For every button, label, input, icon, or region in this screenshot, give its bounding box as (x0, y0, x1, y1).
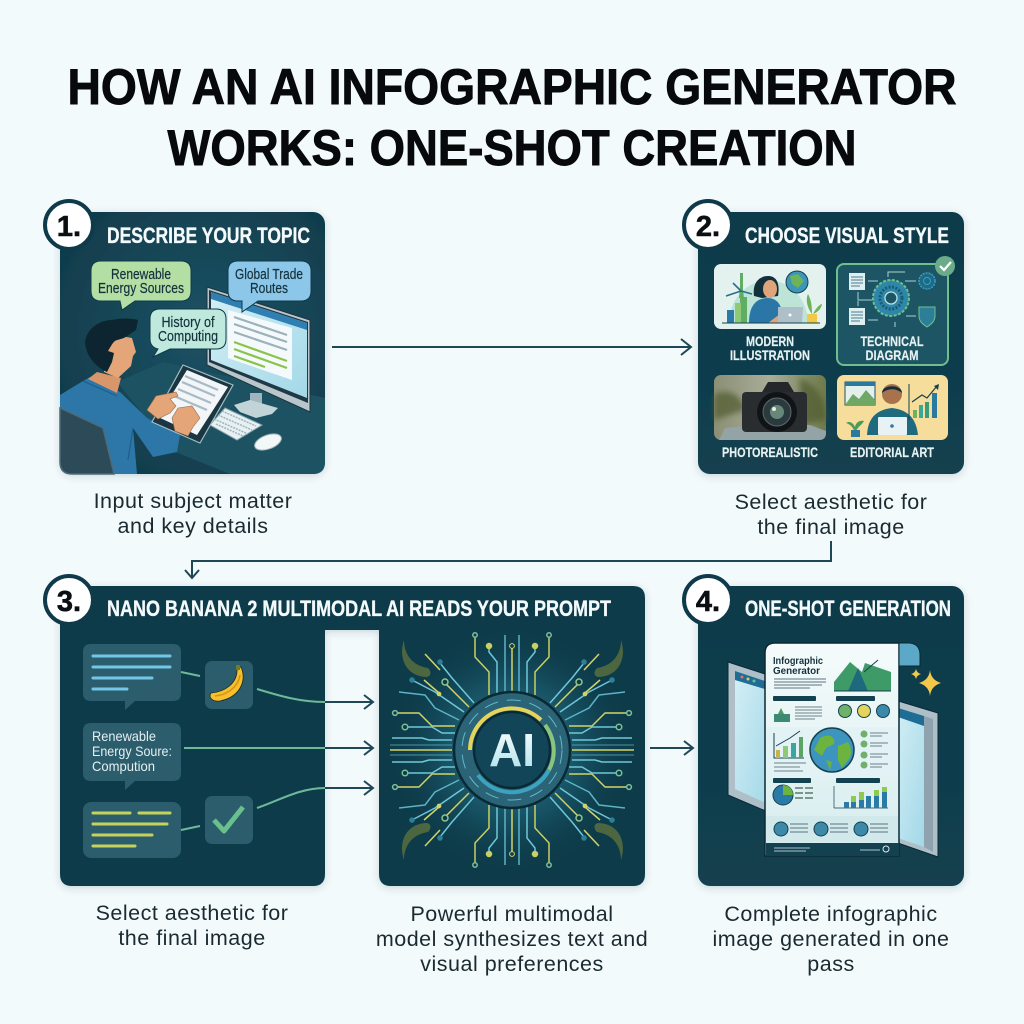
panel 1: describe your topic (60, 212, 325, 474)
prompt card: text: Renewable (92, 728, 156, 744)
caption: model (376, 902, 648, 976)
caption 2: the final image (757, 515, 905, 539)
prompt card: text: Energy Soure: (92, 743, 172, 759)
AI label: AI (489, 724, 535, 776)
label: technical diagram: DIAGRAM (866, 347, 918, 363)
icon: check tile (205, 796, 253, 844)
caption: model: model synthesizes text and (376, 927, 648, 951)
connector: card to check (181, 826, 200, 830)
caption 3 (96, 901, 288, 950)
caption 2: Select aesthetic for (735, 490, 927, 514)
label: modern illustration (730, 333, 810, 363)
caption 1 (94, 489, 292, 538)
arrow 3 to 4 (650, 741, 693, 755)
heading 4: ONE-SHOT GENERATION (745, 596, 951, 621)
caption 2 (735, 490, 927, 539)
poster: Infographic (773, 655, 823, 667)
title: HOW AN AI INFOGRAPHIC GENERATOR (68, 59, 956, 115)
thumbnail: photorealistic (714, 375, 826, 440)
arrow 2 to 3 (185, 541, 831, 578)
check badge (935, 256, 955, 276)
caption 4: Complete infographic (724, 902, 938, 926)
bubble: global trade routes (228, 261, 311, 312)
connector: card to banana (181, 672, 200, 676)
hands (147, 392, 200, 436)
bubble: global trade routes: Global Trade (235, 266, 303, 283)
caption 3: the final image (118, 926, 266, 950)
label: technical diagram (860, 333, 924, 363)
prompt card: text (83, 723, 181, 790)
back device left (728, 662, 768, 812)
caption 1: Input subject matter (94, 489, 292, 513)
bubble: history of computing: Computing (158, 328, 218, 345)
poster (765, 643, 920, 856)
badge 1: 1. (57, 211, 81, 243)
panel 3: nano banana multimodal (60, 586, 645, 886)
person (60, 318, 180, 474)
keyboard (210, 408, 262, 440)
prompt card: green lines (83, 802, 181, 858)
badge 4 (684, 576, 732, 624)
desk (117, 362, 325, 474)
mouse (252, 431, 284, 453)
AI core (454, 692, 570, 808)
label: modern illustration: MODERN (746, 333, 794, 349)
caption 4: pass (807, 952, 855, 976)
circuit traces (390, 633, 634, 867)
bubble: renewable energy sources: Renewable (111, 266, 171, 283)
label: photorealistic: PHOTOREALISTIC (722, 444, 818, 460)
connectors in panel 3 (184, 689, 325, 808)
badge 2: 2. (696, 211, 720, 243)
sparkle stars (911, 669, 941, 696)
badge 2 (684, 201, 732, 249)
badge 1 (45, 201, 93, 249)
caption: model: Powerful multimodal (410, 902, 614, 926)
thumbnail: technical diagram (837, 264, 948, 365)
prompt card: blue lines (83, 644, 181, 710)
prompt card: text: Compution (92, 758, 155, 774)
panel 2: choose visual style (698, 212, 964, 474)
caption 1: and key details (118, 514, 268, 538)
arrow 1 to 2 (332, 339, 691, 355)
badge 3: 3. (57, 586, 81, 618)
label: editorial art: EDITORIAL ART (850, 444, 934, 460)
caption 4 (713, 902, 949, 976)
bubble: global trade routes: Routes (250, 280, 288, 297)
title (68, 59, 956, 176)
heading 1: DESCRIBE YOUR TOPIC (107, 223, 310, 248)
heading 3: NANO BANANA 2 MULTIMODAL AI READS YOUR PROMPT (107, 596, 611, 621)
thumbnail: editorial art (837, 375, 948, 440)
thumbnail: modern illustration (714, 264, 826, 329)
label: technical diagram: TECHNICAL (860, 333, 924, 349)
icon: banana tile (205, 661, 253, 709)
bubble: renewable energy sources (91, 261, 191, 310)
AI glow (387, 625, 637, 875)
bubble: history of computing: History of (162, 314, 215, 331)
label: modern illustration: ILLUSTRATION (730, 347, 810, 363)
tablet (152, 365, 233, 443)
faint bananas (402, 640, 623, 860)
back device right (895, 700, 938, 857)
bubble: renewable energy sources: Energy Sources (98, 280, 184, 297)
caption 4: image generated in one (713, 927, 949, 951)
heading 2: CHOOSE VISUAL STYLE (745, 223, 949, 248)
bubble: history of computing (150, 309, 226, 357)
badge 3 (45, 576, 93, 624)
monitor (207, 287, 310, 418)
poster: Generator (773, 665, 820, 677)
badge 4: 4. (696, 586, 720, 618)
title: WORKS: ONE-SHOT CREATION (168, 120, 856, 176)
panel 4: one-shot generation (698, 586, 964, 886)
caption 3: Select aesthetic for (96, 901, 288, 925)
caption: model: visual preferences (420, 952, 604, 976)
input arrows (325, 695, 373, 795)
